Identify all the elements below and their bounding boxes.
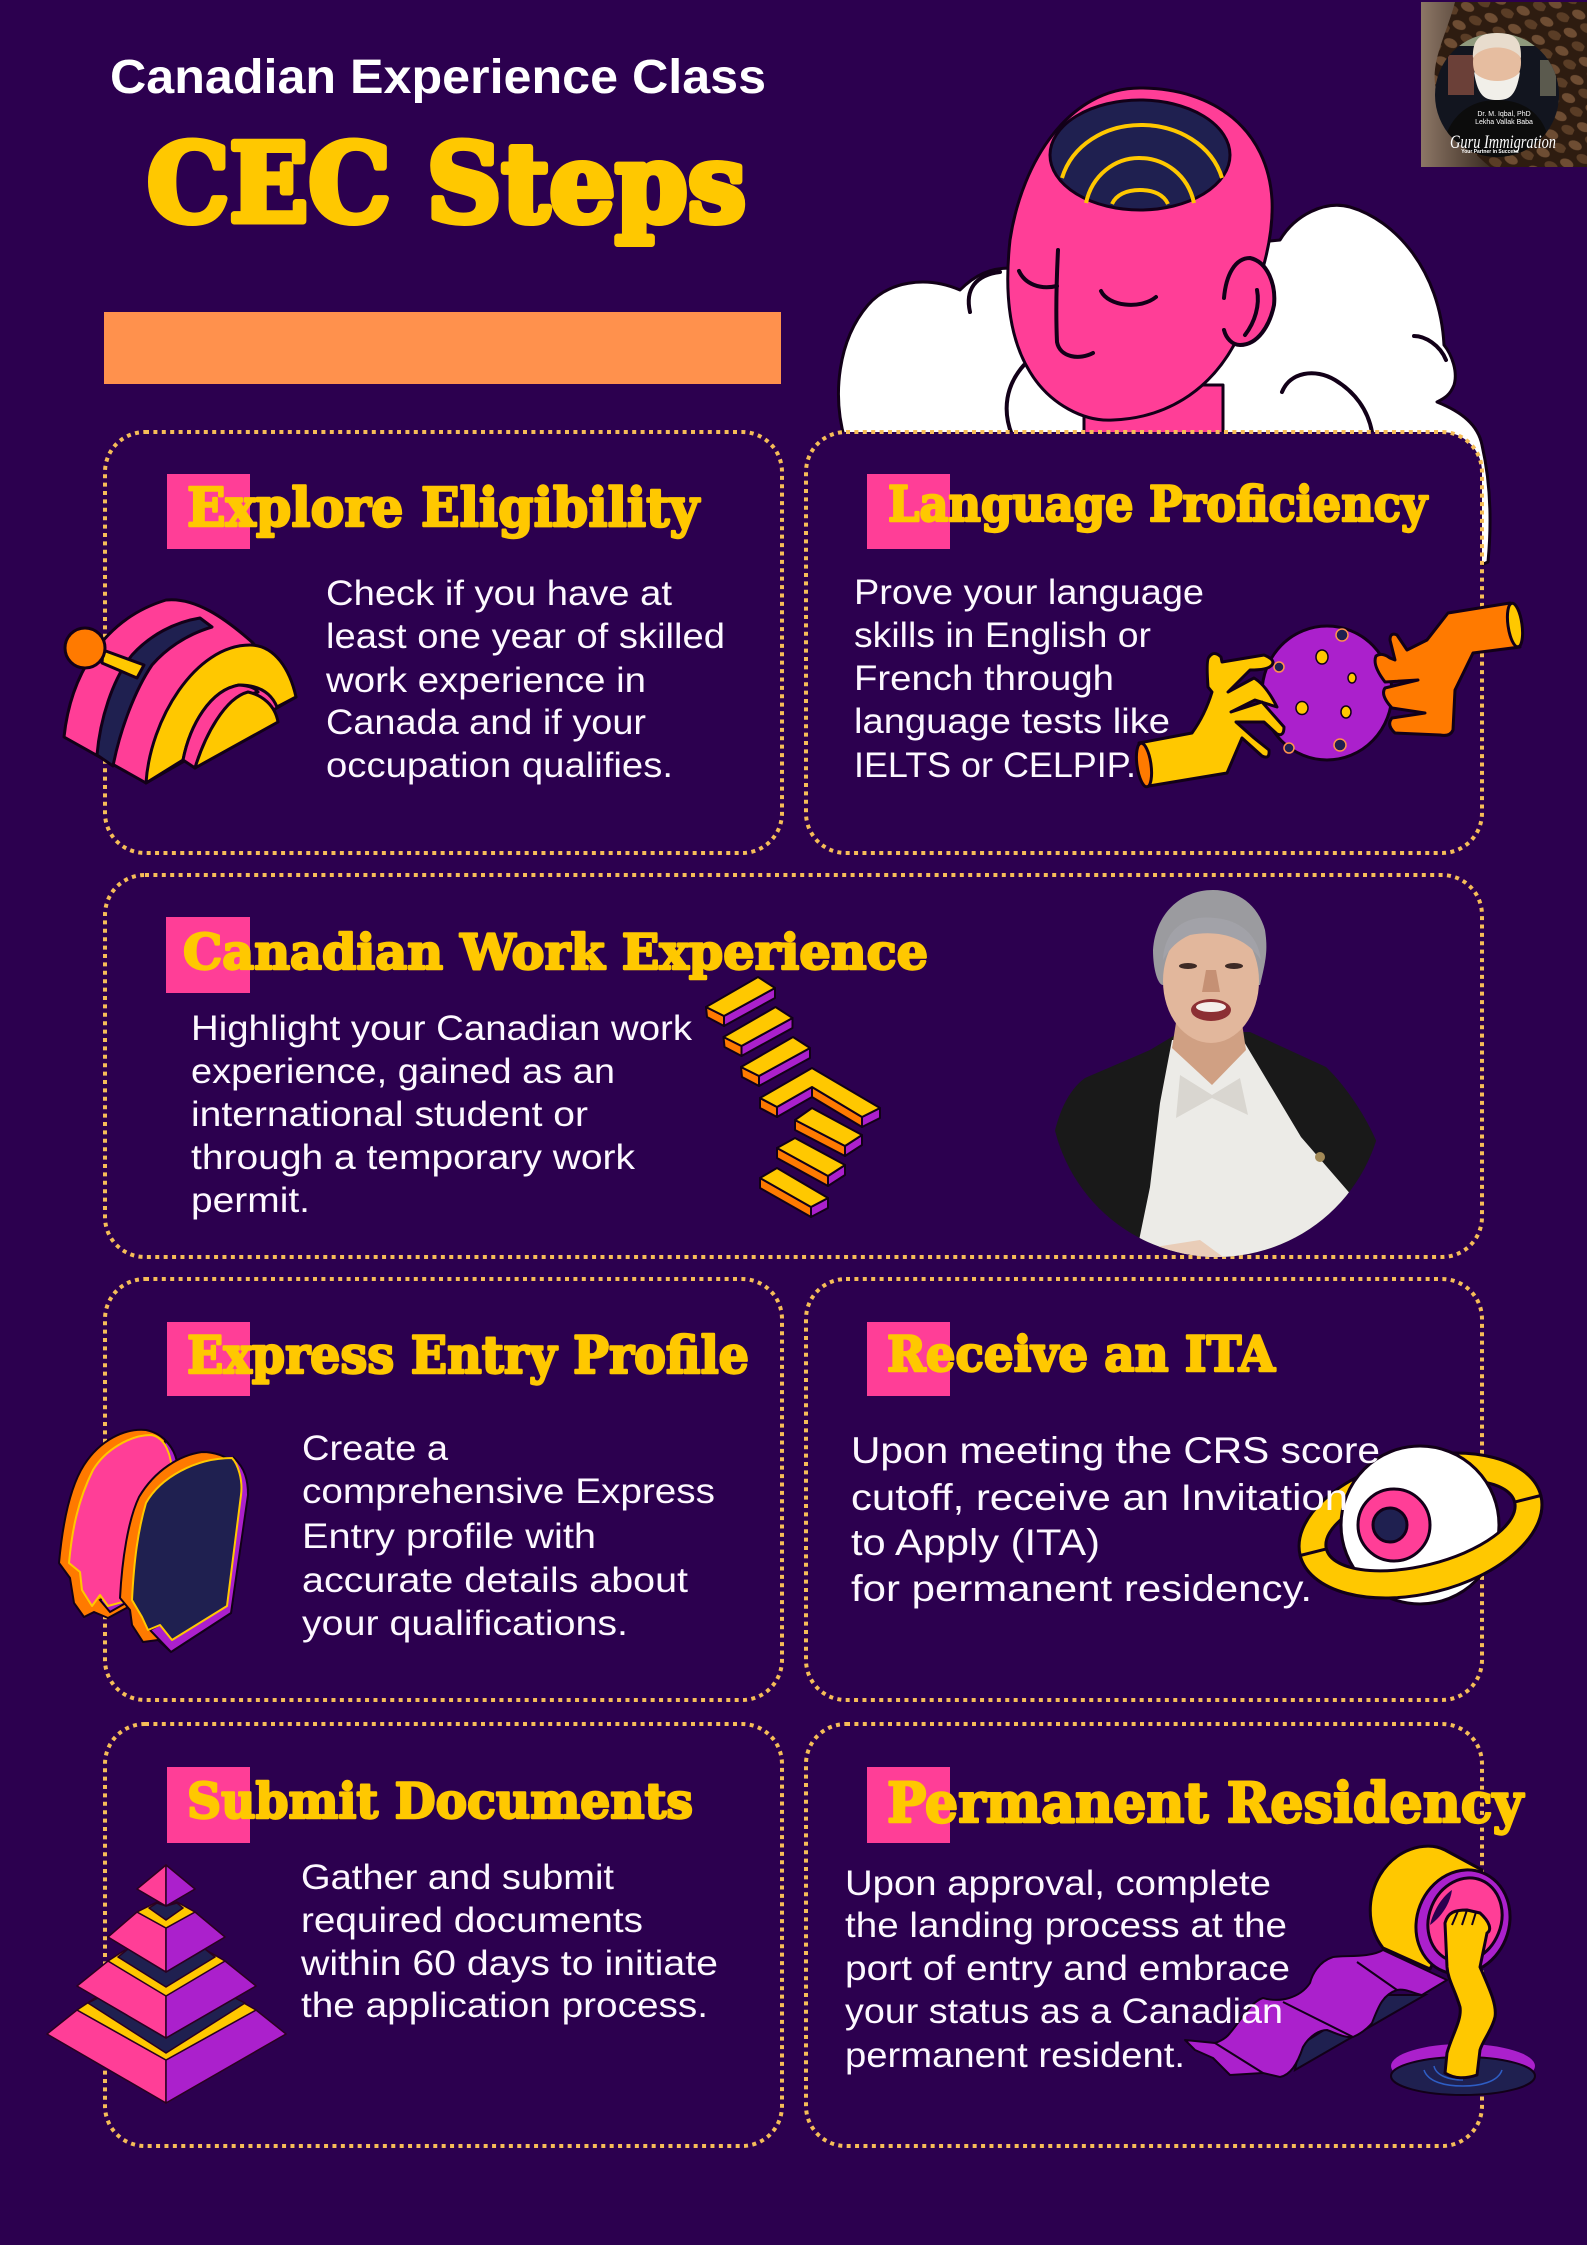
logo text: Dr. M. Iqbal, PhD xyxy=(1477,111,1531,118)
body text: permit. xyxy=(191,1181,310,1220)
logo: Guru Immigration xyxy=(1421,2,1587,167)
icon: isometric steps xyxy=(706,977,880,1217)
heading: Canadian Work Experience xyxy=(183,923,928,981)
body text: IELTS or CELPIP. xyxy=(854,746,1136,785)
icon: two head profiles xyxy=(59,1430,248,1652)
body text: French through xyxy=(854,659,1114,698)
body text: Upon meeting the CRS score xyxy=(851,1430,1380,1471)
body text: skills in English or xyxy=(854,616,1151,655)
panel border xyxy=(105,1279,782,1700)
ear xyxy=(1224,258,1274,345)
body text: Gather and submit xyxy=(301,1858,614,1897)
panel border xyxy=(105,1724,782,2146)
body text xyxy=(302,1429,715,1643)
logo background xyxy=(1421,2,1587,167)
icon: unrolling tape and hand xyxy=(1185,1846,1535,2095)
panel border xyxy=(806,1279,1482,1700)
body text xyxy=(851,1430,1380,1609)
heading: Submit Documents xyxy=(187,1772,693,1830)
body text: experience, gained as an xyxy=(191,1052,615,1091)
body text: Upon approval, complete xyxy=(845,1864,1271,1903)
head xyxy=(1008,88,1272,420)
heading accent xyxy=(867,1767,950,1843)
heading: Express Entry Profile xyxy=(187,1326,749,1386)
body text: Create a xyxy=(302,1429,449,1468)
panel: permanent residency xyxy=(806,1724,1535,2146)
body text: your status as a Canadian xyxy=(845,1992,1283,2031)
heading: Permanent Residency xyxy=(887,1770,1525,1835)
heading accent xyxy=(167,1322,250,1396)
logo text: Your Partner in Success xyxy=(1461,149,1519,155)
body text: to Apply (ITA) xyxy=(851,1522,1100,1563)
icon: layered pyramid xyxy=(47,1865,286,2103)
panel: submit documents xyxy=(47,1724,782,2146)
body text: Entry profile with xyxy=(302,1517,596,1556)
panel border xyxy=(806,1724,1482,2146)
cloud inner lines xyxy=(969,272,1446,435)
body text: language tests like xyxy=(854,702,1170,741)
logo text xyxy=(1450,111,1556,155)
face lines xyxy=(1019,250,1258,357)
heading: Receive an ITA xyxy=(887,1325,1276,1383)
body text: cutoff, receive an Invitation xyxy=(851,1477,1348,1518)
body text xyxy=(845,1864,1290,2075)
heading accent xyxy=(166,917,250,993)
body text: Highlight your Canadian work xyxy=(191,1009,693,1048)
body text: least one year of skilled xyxy=(326,617,725,656)
heading: Explore Eligibility xyxy=(187,477,701,539)
body text: permanent resident. xyxy=(845,2036,1185,2075)
body text: the landing process at the xyxy=(845,1906,1287,1945)
orange banner xyxy=(104,312,781,384)
title: Canadian Experience Class: Canadian Experience Class xyxy=(110,51,766,104)
panel: canadian work experience xyxy=(105,875,1482,1262)
body text xyxy=(854,573,1204,785)
heading accent xyxy=(867,474,950,549)
logo portrait xyxy=(1435,33,1559,157)
body text: comprehensive Express xyxy=(302,1472,715,1511)
body text: within 60 days to initiate xyxy=(300,1944,718,1983)
body text: occupation qualifies. xyxy=(326,746,673,785)
panel: receive an ITA xyxy=(806,1279,1557,1700)
panel: language proficiency xyxy=(806,432,1525,853)
panel border xyxy=(105,432,782,853)
body text: work experience in xyxy=(325,661,646,700)
body text: required documents xyxy=(301,1901,643,1940)
neck xyxy=(1084,385,1223,445)
heading accent xyxy=(167,474,250,549)
body text: international student or xyxy=(191,1095,588,1134)
panel: explore eligibility xyxy=(64,432,782,853)
body text: for permanent residency. xyxy=(851,1568,1312,1609)
head opening xyxy=(1050,100,1230,210)
logo text: Guru Immigration xyxy=(1450,132,1556,153)
heading: Language Proficiency xyxy=(888,475,1428,533)
icon: striped arch xyxy=(64,600,296,783)
body text: port of entry and embrace xyxy=(845,1949,1290,1988)
logo text: Lekha Vallak Baba xyxy=(1475,119,1533,126)
body text: the application process. xyxy=(301,1986,708,2025)
body text: through a temporary work xyxy=(191,1138,636,1177)
body text: accurate details about xyxy=(302,1561,688,1600)
title: CEC Steps: CEC Steps xyxy=(147,121,746,247)
icon: hands holding a globe xyxy=(1134,602,1525,788)
body text xyxy=(300,1858,718,2025)
cloud xyxy=(839,205,1490,600)
body text: your qualifications. xyxy=(302,1604,628,1643)
panel border xyxy=(105,875,1482,1257)
body text: Check if you have at xyxy=(326,574,672,613)
body text: Canada and if your xyxy=(326,703,646,742)
heading accent xyxy=(867,1322,950,1396)
body text xyxy=(325,574,725,785)
body text xyxy=(191,1009,693,1220)
body text: Prove your language xyxy=(854,573,1204,612)
panel: express entry profile xyxy=(59,1279,782,1700)
heading accent xyxy=(167,1767,250,1843)
panel border xyxy=(806,432,1482,853)
icon: ringed planet xyxy=(1284,1430,1557,1621)
illustration: head in the clouds xyxy=(839,88,1490,600)
photo: smiling woman xyxy=(1040,890,1390,1262)
